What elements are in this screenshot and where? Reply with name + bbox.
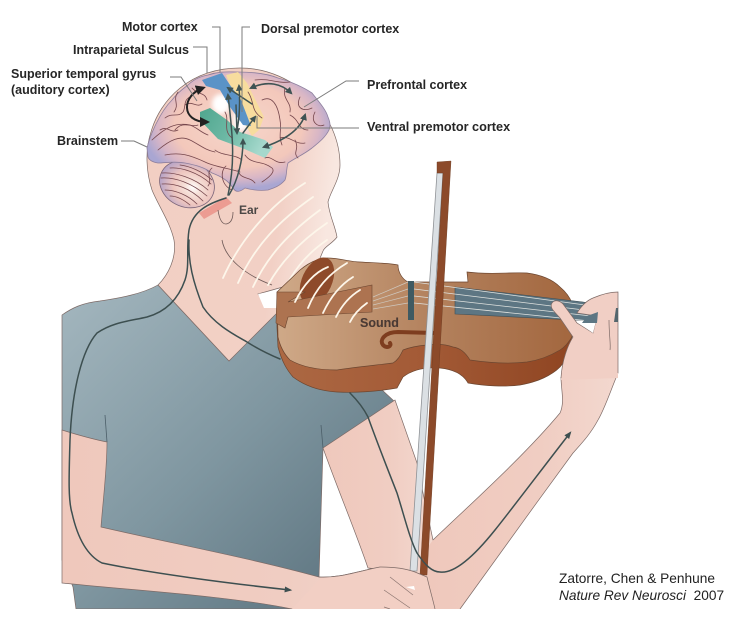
- head and neck: [147, 68, 340, 361]
- dorsal vertical arrow: [237, 86, 240, 130]
- right forearm: [424, 320, 618, 609]
- ventral arrow: [243, 117, 255, 133]
- motor descending arrow: [236, 105, 237, 133]
- bow: [410, 161, 451, 575]
- label: superior temporal gyrus: (auditory cortex): [11, 83, 110, 97]
- shirt: [62, 285, 395, 609]
- sound waves from violin to ear: [223, 183, 327, 298]
- strings over belly: [373, 282, 408, 309]
- chin rest: [293, 252, 341, 310]
- sulci: [152, 80, 324, 190]
- bowing upper arm: [323, 400, 433, 575]
- fingers: [384, 577, 413, 609]
- label: ventral premotor cortex: Ventral premotor cortex: [367, 120, 510, 134]
- label: motor cortex: [122, 20, 220, 72]
- sleeve fold lines: [105, 415, 323, 448]
- neck end: [614, 308, 618, 322]
- label: ventral premotor cortex: [257, 116, 510, 134]
- violin ribs: [277, 320, 572, 392]
- label: brainstem: Brainstem: [57, 134, 118, 148]
- label: prefrontal cortex: [304, 78, 467, 107]
- label: intraparietal sulcus: [73, 43, 207, 73]
- fingerboard: [455, 287, 618, 322]
- region: teal auditory and ventral premotor: [200, 108, 273, 158]
- strings over fingerboard: [414, 282, 600, 322]
- hand on violin neck: [551, 292, 618, 380]
- nerve through bowing arm to hand: [350, 393, 570, 572]
- sound waves leaving violin: [295, 263, 367, 322]
- ascending pathway: [229, 140, 243, 195]
- forearm outline: [433, 373, 618, 609]
- nerve to left arm: [69, 198, 290, 590]
- ear canal bar: [199, 197, 232, 219]
- neck strip: [582, 312, 598, 323]
- label: motor cortex: Motor cortex: [122, 20, 198, 34]
- dorsal to prefrontal arrow: [251, 84, 291, 93]
- premotor arrow: [228, 88, 252, 104]
- f-hole: [382, 332, 434, 347]
- hand outline: [319, 567, 435, 609]
- ear: [199, 197, 233, 224]
- cerebellum: [152, 152, 222, 216]
- label: intraparietal sulcus: Intraparietal Sulcus: [73, 43, 189, 57]
- knuckle highlight: [406, 586, 415, 590]
- tailpiece: [276, 285, 372, 328]
- brain: [147, 72, 330, 216]
- region: yellow dorsal premotor: [226, 72, 264, 136]
- bow hand: [292, 567, 435, 609]
- page bottom mask: [0, 609, 730, 618]
- gap between thumb and finger: [580, 321, 596, 333]
- ear outline: [218, 210, 233, 224]
- pathway arrows: [187, 84, 305, 195]
- label: brainstem: [57, 134, 147, 148]
- citation: Nature Rev Neurosci 2007: [559, 588, 724, 603]
- sound label: Sound: [360, 316, 399, 330]
- citation: Zatorre, Chen & Penhune: [559, 571, 715, 586]
- violin: [276, 252, 618, 392]
- label: dorsal premotor cortex: Dorsal premotor cortex: [261, 22, 399, 36]
- bow stick: [420, 161, 451, 575]
- descending pathway: [228, 95, 233, 195]
- label: prefrontal cortex: Prefrontal cortex: [367, 78, 467, 92]
- label: dorsal premotor cortex: [242, 22, 399, 112]
- citation: [559, 571, 724, 603]
- hand outline: [551, 292, 618, 378]
- ventral to prefrontal arrow: [264, 115, 305, 147]
- hand shape: [292, 567, 435, 609]
- nerve to bowing arm: [189, 240, 280, 359]
- palm and thumb fill: [551, 292, 618, 380]
- cerebrum: [147, 72, 330, 191]
- jaw line: [222, 240, 272, 285]
- finger crease: [609, 320, 610, 350]
- region: blue motor cortex: [202, 73, 251, 126]
- ear label: Ear: [239, 203, 259, 217]
- bow hair: [410, 173, 443, 571]
- bridge: [408, 281, 414, 320]
- label: superior temporal gyrus: Superior temporal gyrus: [11, 67, 156, 81]
- loop arrow in auditory region: [187, 88, 207, 122]
- violin top plate: [277, 258, 572, 370]
- left arm, extended to hand: [62, 430, 435, 609]
- label: superior temporal gyrus: [11, 67, 197, 101]
- chin notch highlight: [258, 290, 279, 308]
- white patches: [212, 94, 249, 131]
